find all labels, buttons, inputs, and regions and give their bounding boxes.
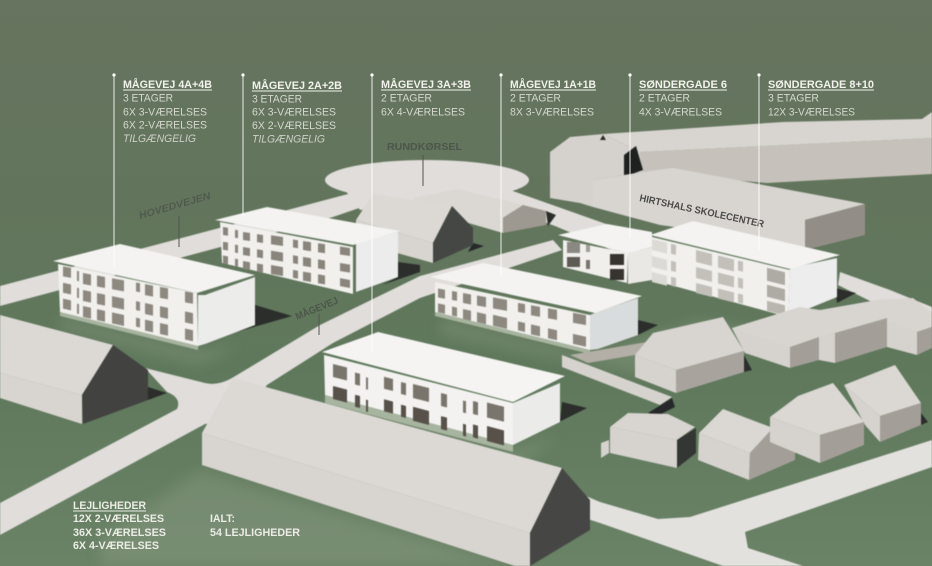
callout: Mågevej 2A+2B: TILGÆNGELIG: [252, 134, 325, 146]
callout: Mågevej 4A+4B: [112, 73, 212, 267]
houses behind roundabout: [356, 189, 556, 263]
callout: Mågevej 2A+2B: 6X 3-VÆRELSES: [252, 106, 336, 118]
callout: Mågevej 4A+4B: 6X 2-VÆRELSES: [123, 120, 207, 132]
callout: Mågevej 4A+4B: 3 ETAGER: [123, 92, 173, 104]
callout: Mågevej 1A+1B: 8X 3-VÆRELSES: [510, 106, 594, 118]
callout: Søndergade 6: [628, 73, 727, 238]
callout: Mågevej 4A+4B: 6X 3-VÆRELSES: [123, 106, 207, 118]
callout: Mågevej 4A+4B: TILGÆNGELIG: [123, 133, 196, 145]
map label: Mågevej: [293, 294, 340, 335]
callout: Mågevej 2A+2B: [241, 73, 342, 217]
callout: Søndergade 8+10: SØNDERGADE 8+10: [768, 79, 874, 91]
callout: Mågevej 1A+1B: 2 ETAGER: [510, 92, 561, 104]
roads and roundabout: [0, 160, 932, 566]
house A: [635, 317, 752, 393]
callout: Mågevej 3A+3B: [370, 73, 471, 353]
summary: apartment types: LEJLIGHEDER: [73, 500, 146, 512]
house: left foreground: [0, 315, 148, 424]
summary: apartment types: 36X 3-VÆRELSES: [73, 527, 166, 539]
map label: Mågevej: MÅGEVEJ: [293, 294, 340, 323]
house E: [770, 383, 864, 463]
summary: apartment types: [73, 500, 166, 552]
callout: Søndergade 6: 4X 3-VÆRELSES: [639, 106, 722, 118]
map label: Hirtshals Skolecenter: HIRTSHALS SKOLECENTER: [638, 193, 766, 230]
summary: total: [210, 513, 300, 539]
callout: Søndergade 8+10: 3 ETAGER: [768, 92, 819, 104]
map label: Hovedvejen: [138, 191, 213, 247]
callout: Mågevej 2A+2B: MÅGEVEJ 2A+2B: [252, 79, 342, 92]
house C: [601, 413, 696, 468]
map label: Hovedvejen: HOVEDVEJEN: [138, 191, 213, 222]
callout: Søndergade 6: 2 ETAGER: [639, 92, 690, 104]
callout: Mågevej 1A+1B: MÅGEVEJ 1A+1B: [510, 78, 596, 91]
callout: Søndergade 6: SØNDERGADE 6: [639, 79, 727, 91]
house group: right long block: [732, 298, 932, 368]
callout: Mågevej 2A+2B: 3 ETAGER: [252, 94, 302, 106]
building: Søndergade 8+10: [650, 221, 840, 317]
summary: apartment types: 6X 4-VÆRELSES: [73, 540, 159, 552]
callout: Mågevej 3A+3B: MÅGEVEJ 3A+3B: [381, 78, 471, 91]
building: Mågevej 1A+1B: [430, 263, 642, 354]
map label: Rundkørsel: RUNDKØRSEL: [387, 142, 462, 153]
summary: total: IALT:: [210, 513, 235, 525]
summary: apartment types: 12X 2-VÆRELSES: [73, 513, 164, 525]
shadows: [148, 262, 856, 433]
Hirtshals Skolecenter buildings: [550, 112, 932, 250]
map label: Rundkørsel: [387, 142, 462, 186]
ground glow near buildings: [60, 316, 760, 566]
low fence and ramp: [562, 342, 675, 416]
summary: total: 54 LEJLIGHEDER: [210, 527, 300, 539]
building: Mågevej 4A+4B: [53, 244, 255, 350]
building: Mågevej 3A+3B: [322, 332, 565, 452]
callout: Mågevej 3A+3B: 6X 4-VÆRELSES: [381, 106, 465, 118]
house D: [698, 409, 795, 480]
building: Mågevej 2A+2B: [215, 207, 400, 294]
house F: [844, 365, 928, 442]
callout: Mågevej 2A+2B: 6X 2-VÆRELSES: [252, 120, 336, 132]
callout: Mågevej 4A+4B: MÅGEVEJ 4A+4B: [123, 78, 212, 91]
callout: Søndergade 8+10: 12X 3-VÆRELSES: [768, 106, 855, 118]
house: long foreground: [202, 378, 590, 566]
callout: Mågevej 1A+1B: [499, 73, 596, 275]
callout: Søndergade 8+10: [757, 73, 874, 250]
callout: Mågevej 3A+3B: 2 ETAGER: [381, 92, 432, 104]
building: Søndergade 6: [558, 224, 652, 284]
